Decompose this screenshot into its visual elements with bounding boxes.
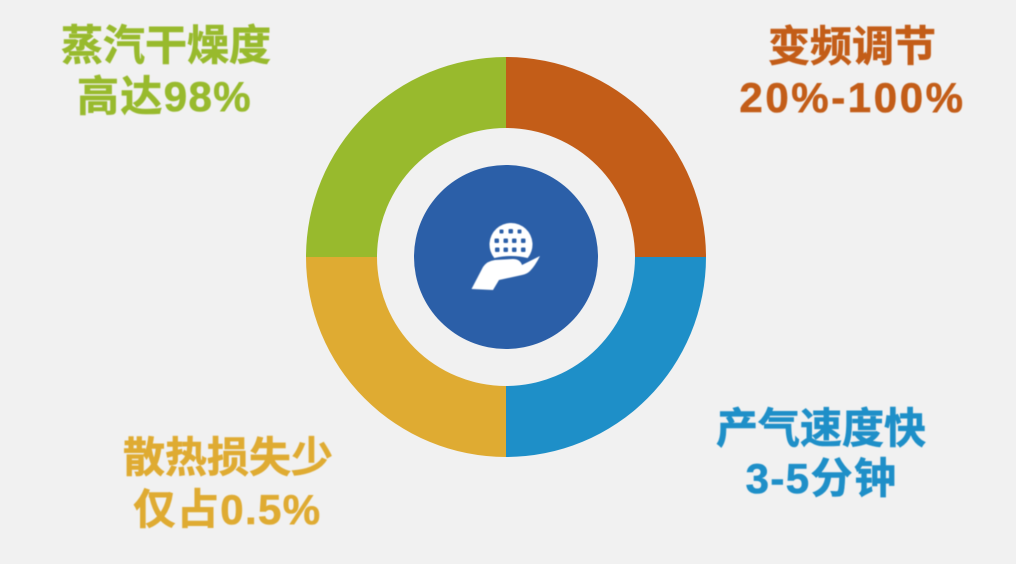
- center circle: [414, 165, 598, 349]
- label: heat loss: 仅占0.5%: [133, 486, 322, 533]
- segment: steam dryness (green): [306, 57, 506, 257]
- label: steam speed: 产气速度快: [716, 405, 926, 452]
- segment: heat loss (yellow): [306, 257, 506, 457]
- label: steam dryness: 蒸汽干燥度: [61, 22, 271, 69]
- label: heat loss: 散热损失少: [123, 434, 333, 481]
- label: steam speed: 3-5分钟: [746, 455, 897, 502]
- label: steam speed: [716, 405, 926, 502]
- icon: hand holding globe: [472, 223, 540, 290]
- segment: steam speed (blue): [506, 257, 706, 457]
- segment: variable frequency (orange): [506, 57, 706, 257]
- donut chart: [306, 57, 706, 457]
- label: steam dryness: 高达98%: [77, 73, 252, 120]
- label: heat loss: [123, 434, 333, 533]
- label: steam dryness: [61, 22, 271, 120]
- icon: globe: [489, 223, 532, 258]
- label: variable frequency: [739, 23, 966, 121]
- label: variable frequency: 20%-100%: [739, 74, 966, 121]
- label: variable frequency: 变频调节: [768, 23, 936, 70]
- icon: open hand: [472, 256, 540, 290]
